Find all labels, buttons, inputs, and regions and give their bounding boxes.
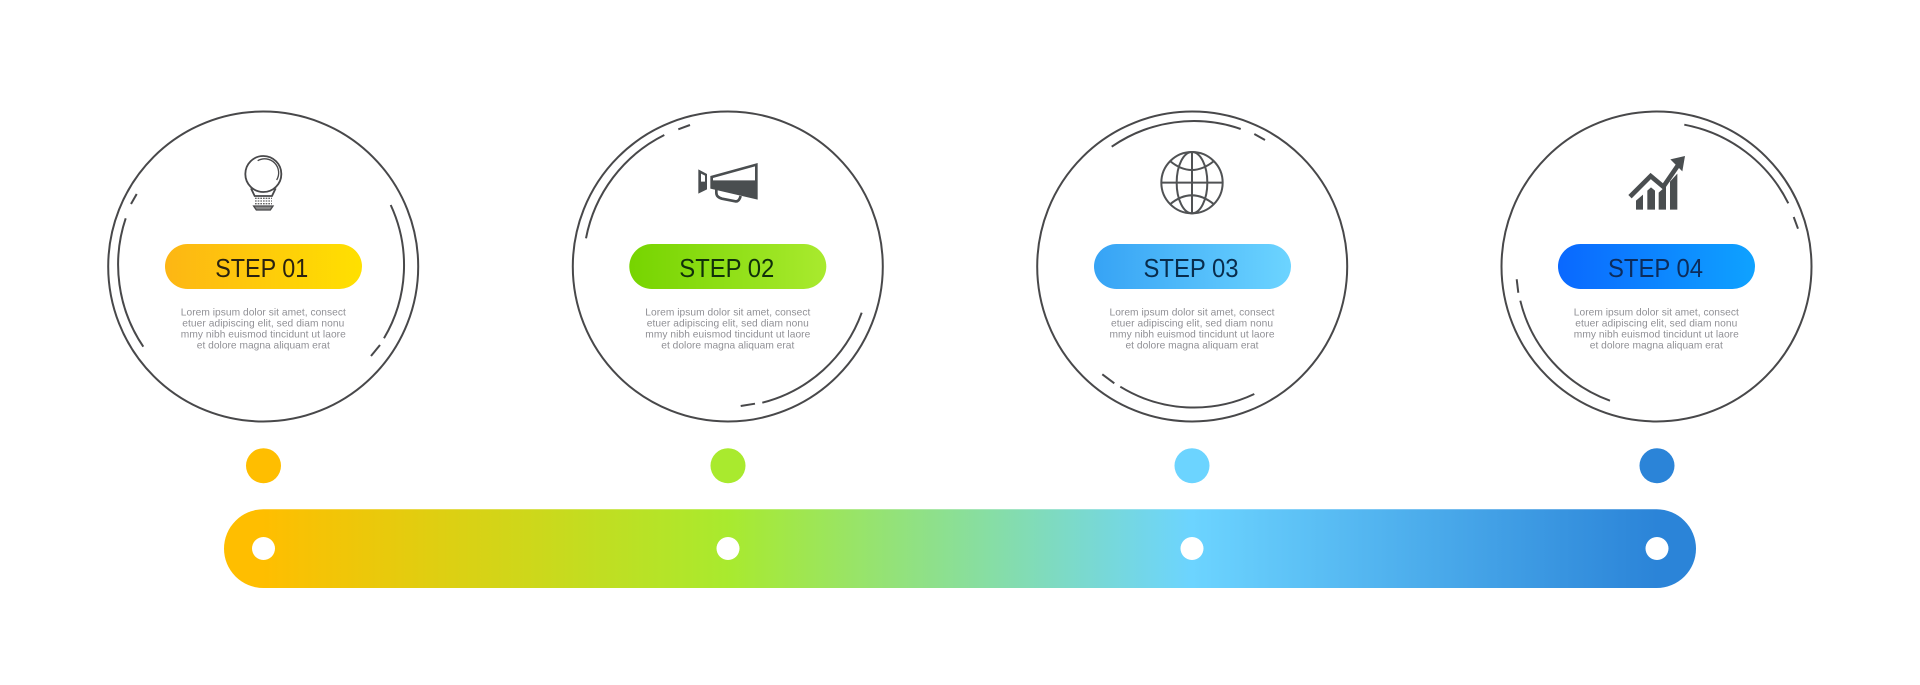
description: step 02: mmy nibh euismod tincidunt ut laore bbox=[645, 329, 811, 340]
panel: step 03 bbox=[1037, 112, 1347, 422]
inner arcs 4 bbox=[1517, 125, 1798, 401]
description: step 01: etuer adipiscing elit, sed diam nonu bbox=[182, 318, 344, 329]
description: step 02: Lorem ipsum dolor sit amet, consect bbox=[645, 307, 810, 318]
description: step 03: et dolore magna aliquam erat bbox=[1126, 341, 1259, 352]
outer circle 3 bbox=[1037, 112, 1347, 422]
inner arcs 2 bbox=[586, 125, 862, 406]
inner arcs 3 bbox=[1102, 121, 1265, 408]
timeline markers bbox=[246, 448, 1674, 483]
description: step 02: et dolore magna aliquam erat bbox=[661, 341, 794, 352]
label pill: step 04 bbox=[1558, 244, 1755, 289]
outer circle 4 bbox=[1502, 112, 1812, 422]
description: step 02 bbox=[645, 307, 811, 352]
description: step 01 bbox=[181, 307, 346, 352]
description: step 02: etuer adipiscing elit, sed diam nonu bbox=[647, 318, 809, 329]
description: step 03: etuer adipiscing elit, sed diam nonu bbox=[1111, 318, 1273, 329]
label pill: step 03 bbox=[1094, 244, 1291, 289]
description: step 01: mmy nibh euismod tincidunt ut laore bbox=[181, 329, 346, 340]
inner arcs 1 bbox=[118, 194, 404, 356]
label pill: step 01: STEP 01 bbox=[215, 255, 308, 283]
label pill: step 04: STEP 04 bbox=[1608, 255, 1703, 283]
description: step 01: Lorem ipsum dolor sit amet, consect bbox=[181, 307, 346, 318]
description: step 03: Lorem ipsum dolor sit amet, consect bbox=[1110, 307, 1275, 318]
icon: megaphone bbox=[698, 163, 758, 201]
panel: step 04 bbox=[1502, 112, 1812, 422]
label pill: step 02: STEP 02 bbox=[679, 255, 774, 283]
description: step 04: etuer adipiscing elit, sed diam nonu bbox=[1575, 318, 1737, 329]
outer circle 1 bbox=[108, 112, 418, 422]
label pill: step 03: STEP 03 bbox=[1144, 255, 1238, 283]
panel: step 02 bbox=[573, 112, 883, 422]
description: step 04 bbox=[1574, 307, 1739, 352]
description: step 04: Lorem ipsum dolor sit amet, consect bbox=[1574, 307, 1739, 318]
description: step 01: et dolore magna aliquam erat bbox=[197, 341, 330, 352]
icon: light bulb bbox=[245, 156, 281, 210]
description: step 03 bbox=[1110, 307, 1275, 352]
description: step 04: et dolore magna aliquam erat bbox=[1590, 341, 1723, 352]
icon: globe bbox=[1161, 152, 1223, 213]
description: step 03: mmy nibh euismod tincidunt ut laore bbox=[1110, 329, 1275, 340]
gradient timeline bar bbox=[224, 509, 1696, 588]
outer circle 2 bbox=[573, 112, 883, 422]
icon: growth chart bbox=[1630, 156, 1685, 210]
label pill: step 02 bbox=[629, 244, 826, 289]
description: step 04: mmy nibh euismod tincidunt ut laore bbox=[1574, 329, 1739, 340]
label pill: step 01 bbox=[165, 244, 362, 289]
panel: step 01 bbox=[108, 112, 418, 422]
